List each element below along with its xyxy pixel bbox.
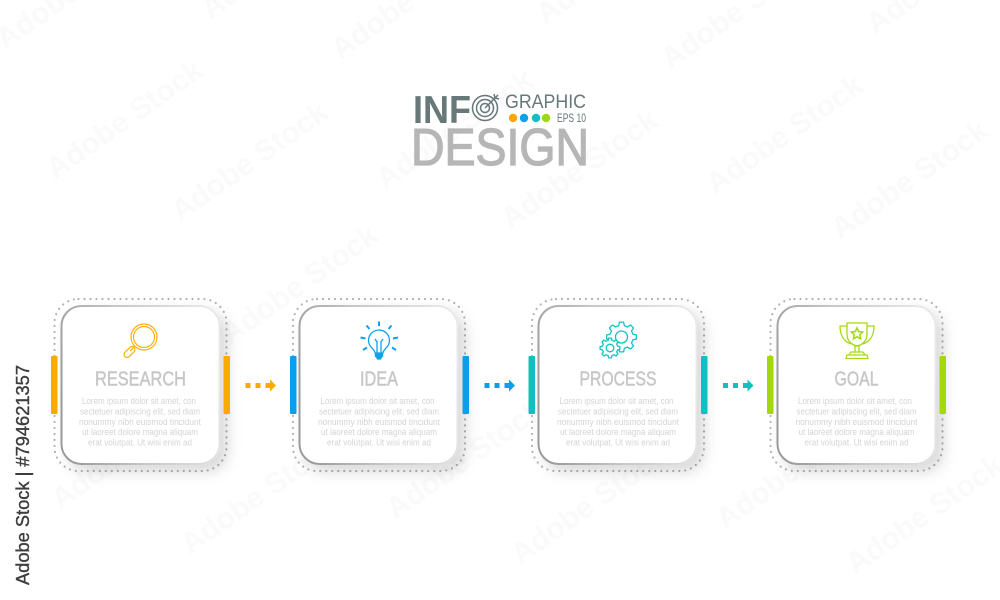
body text: ut laoreet dolore magna aliquam (321, 427, 437, 437)
body text (796, 396, 918, 448)
body text: Lorem ipsum dolor sit amet, con (82, 396, 196, 406)
body text: Lorem ipsum dolor sit amet, con (320, 396, 434, 406)
body text: nonummy nibh euismod tincidunt (79, 417, 201, 427)
body text (79, 396, 201, 448)
title logo (411, 89, 589, 177)
watermark pattern: Adobe Stock (825, 113, 994, 246)
body text: sectetuer adipiscing elit, sed diam (80, 406, 200, 416)
watermark pattern: Adobe Stock (505, 438, 674, 571)
watermark pattern: Adobe Stock (175, 428, 344, 561)
label: EPS 10: EPS 10 (557, 111, 586, 125)
panel: idea (290, 299, 469, 471)
heading: PROCESS (580, 368, 656, 390)
watermark pattern: Adobe Stock (700, 68, 869, 201)
colour dots (509, 114, 550, 122)
accent bars (767, 356, 946, 414)
body text: nonummy nibh euismod tincidunt (557, 417, 679, 427)
body text: erat volutpat. Ut wisi enim ad (566, 438, 670, 448)
body text: ut laoreet dolore magna aliquam (560, 427, 676, 437)
icon: target with arrow (472, 94, 499, 120)
arrow: process to goal (723, 380, 754, 392)
title: INF: INF (413, 89, 471, 132)
body text: Lorem ipsum dolor sit amet, con (560, 396, 674, 406)
icon: light bulb (360, 322, 398, 359)
panel: research (51, 299, 230, 471)
stock id label: Adobe Stock | #794621357 (13, 365, 33, 585)
body text: erat volutpat. Ut wisi enim ad (88, 438, 192, 448)
accent bars (528, 356, 708, 414)
arrow: research to idea (246, 380, 276, 392)
body text: nonummy nibh euismod tincidunt (796, 417, 918, 427)
icon: gears (600, 322, 636, 358)
body text: nonummy nibh euismod tincidunt (318, 417, 440, 427)
body text (557, 396, 679, 448)
watermark pattern: Adobe Stock (40, 53, 209, 186)
heading: GOAL (834, 368, 878, 390)
body text: sectetuer adipiscing elit, sed diam (319, 406, 439, 416)
arrow: idea to process (484, 380, 515, 392)
accent bars (51, 356, 230, 414)
panel: goal (767, 299, 946, 471)
watermark pattern: Adobe Stock (380, 393, 549, 526)
icon: magnifier (123, 324, 157, 359)
body text: sectetuer adipiscing elit, sed diam (558, 406, 678, 416)
body text: sectetuer adipiscing elit, sed diam (796, 406, 916, 416)
body text: erat volutpat. Ut wisi enim ad (804, 438, 908, 448)
body text: ut laoreet dolore magna aliquam (798, 427, 914, 437)
watermark pattern: Adobe Stock (45, 383, 214, 516)
watermark pattern: Adobe Stock (495, 103, 664, 236)
watermark pattern: Adobe Stock (370, 63, 539, 196)
body text: Lorem ipsum dolor sit amet, con (798, 396, 912, 406)
panel: process (528, 299, 708, 471)
title: DESIGN: DESIGN (411, 119, 589, 177)
body text (318, 396, 440, 448)
watermark pattern: Adobe Stock (165, 95, 334, 228)
icon: trophy (840, 323, 874, 358)
heading: RESEARCH (95, 368, 186, 390)
subtitle: GRAPHIC: GRAPHIC (505, 92, 586, 113)
watermark pattern: Adobe Stock (710, 403, 879, 536)
body text: erat volutpat. Ut wisi enim ad (327, 438, 431, 448)
watermark pattern: Adobe Stock (215, 218, 384, 351)
accent bars (290, 356, 469, 414)
heading: IDEA (360, 368, 399, 390)
body text: ut laoreet dolore magna aliquam (82, 427, 198, 437)
